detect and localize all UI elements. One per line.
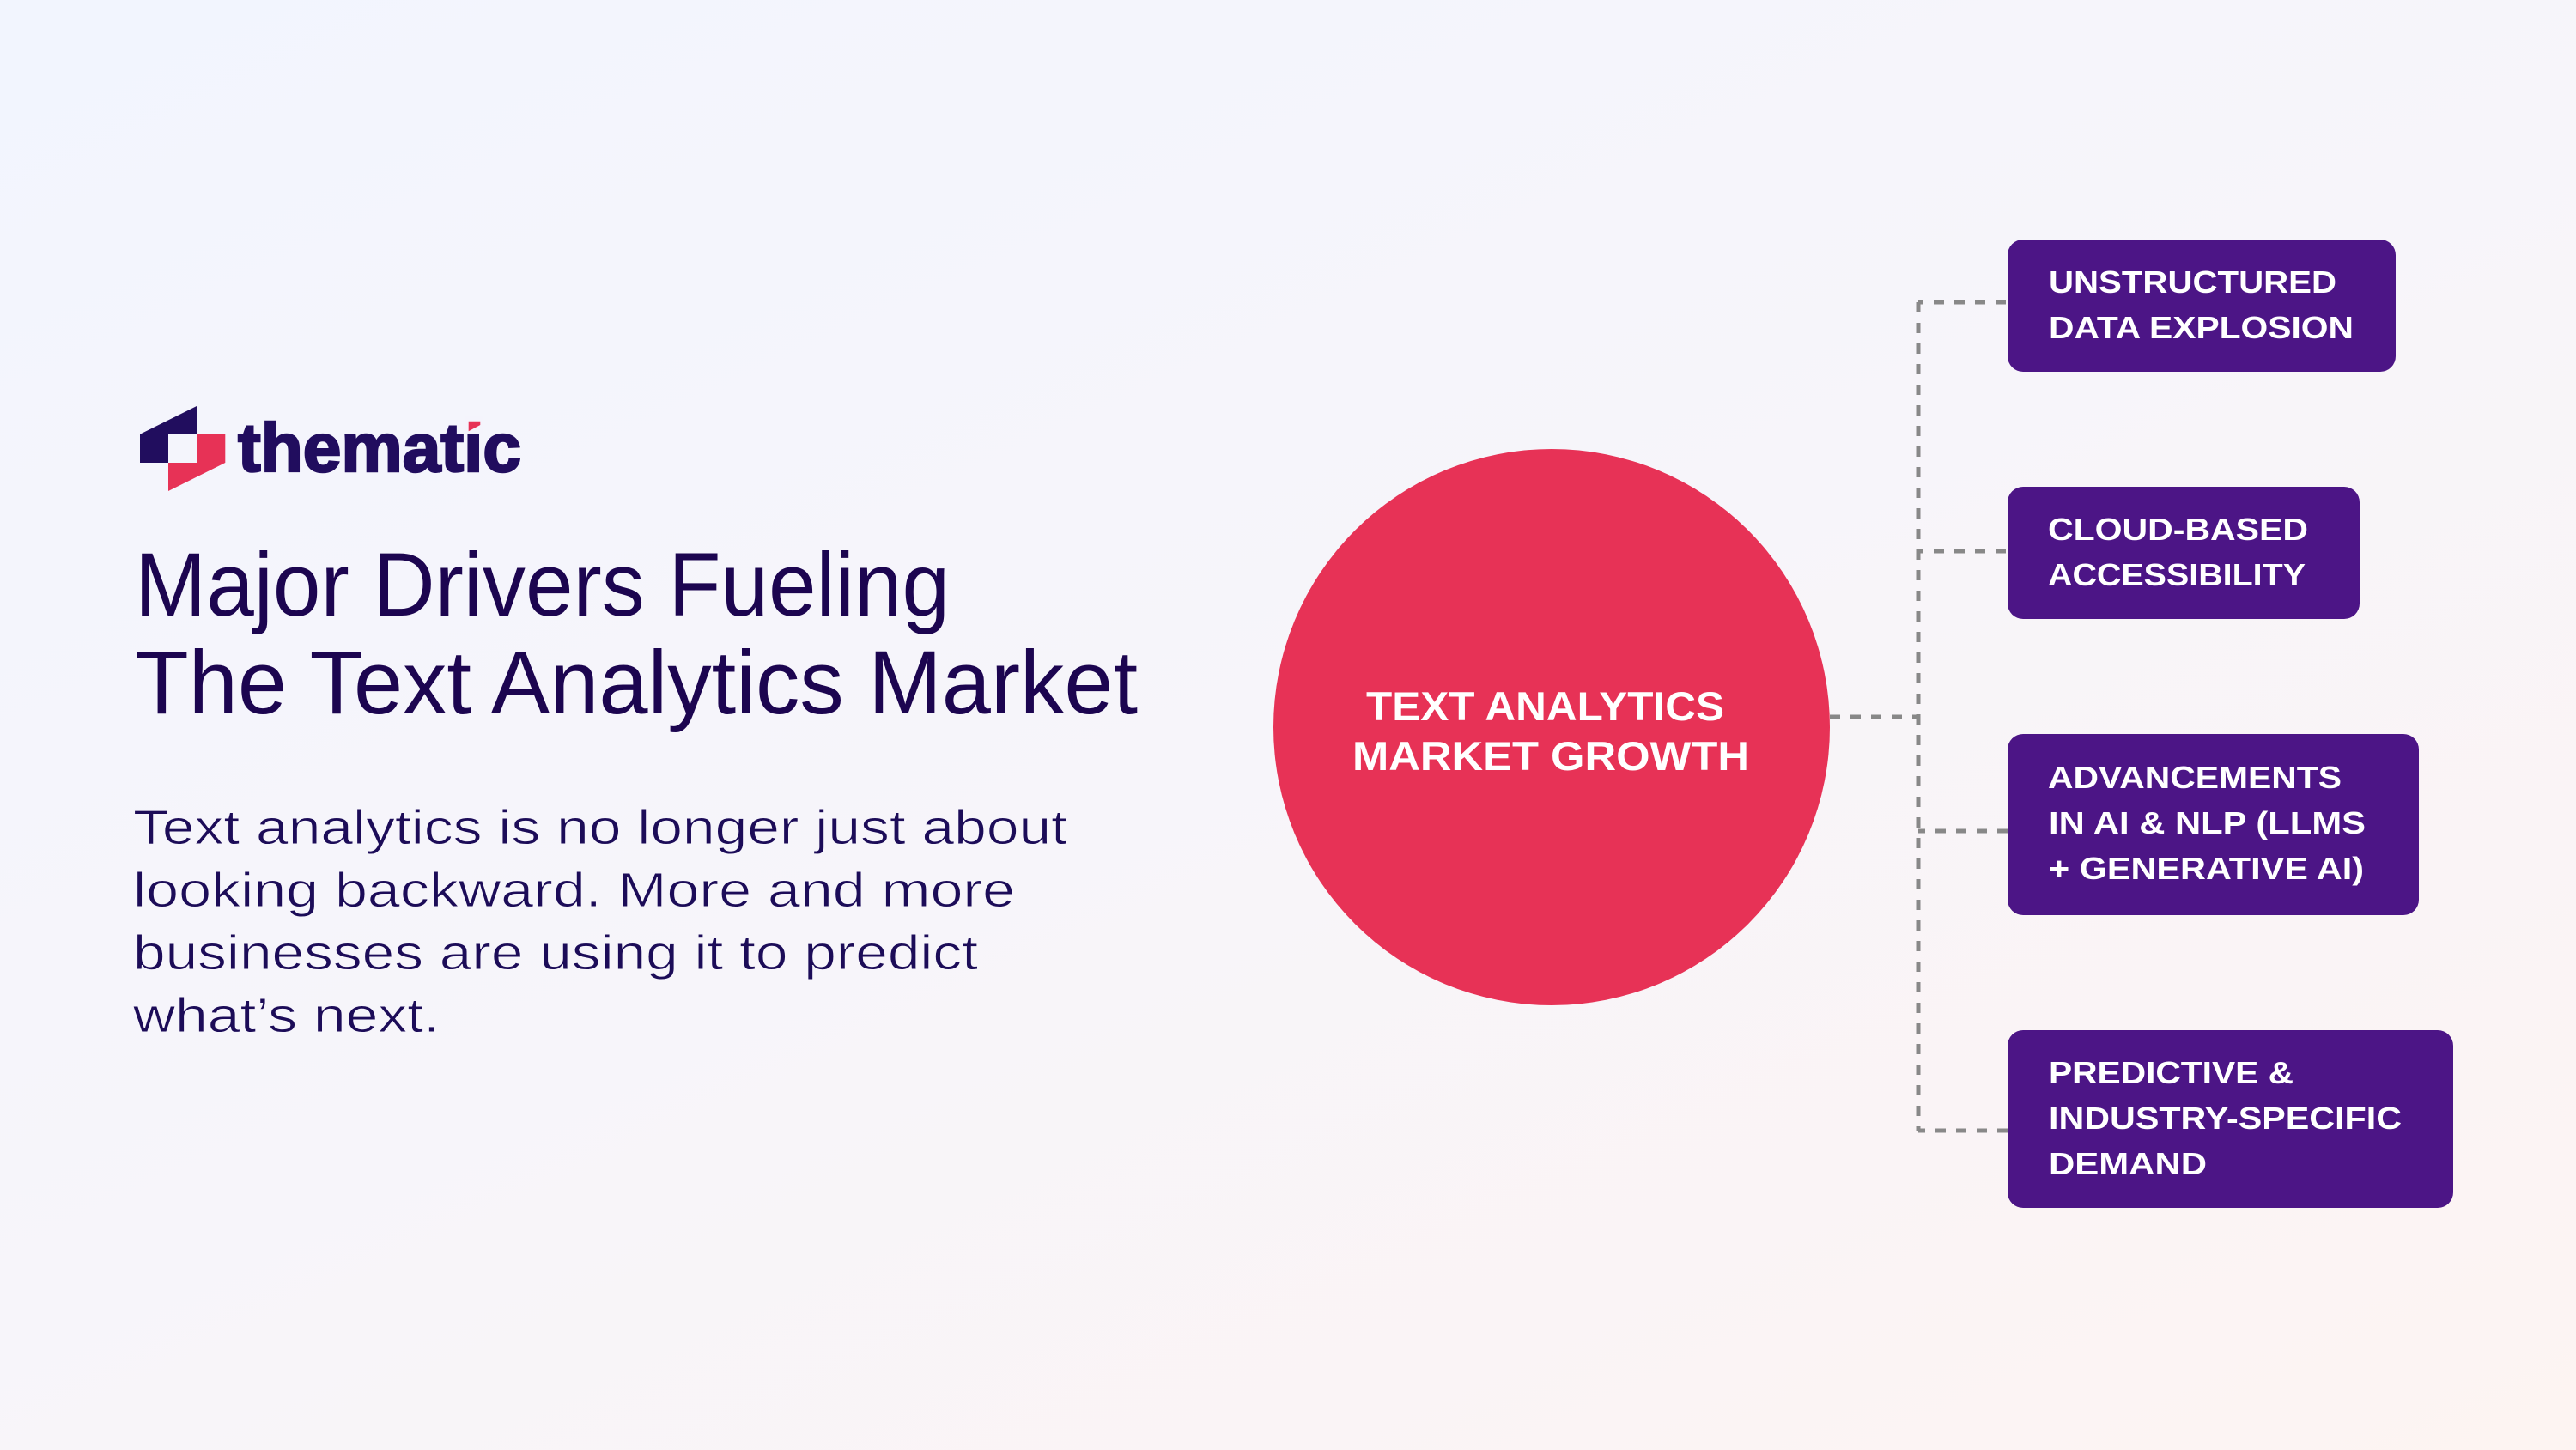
connector lines: [1830, 302, 2008, 1131]
driver box: unstructured data explosion: UNSTRUCTURED: [2049, 264, 2336, 300]
driver box: predictive and industry-specific demand: PREDICTIVE &: [2049, 1055, 2293, 1090]
body text: Text analytics is no longer just about: [133, 800, 1067, 855]
driver box: cloud-based accessibility: CLOUD-BASED: [2048, 512, 2308, 547]
mask over the dot of the letter i: [465, 416, 483, 433]
driver box: predictive and industry-specific demand: [2008, 1030, 2453, 1208]
driver box: predictive and industry-specific demand: DEMAND: [2049, 1146, 2207, 1181]
wordmark: thematic: [238, 410, 521, 486]
driver box: advancements in AI and NLP: ADVANCEMENTS: [2048, 760, 2342, 795]
body text: what’s next.: [132, 988, 440, 1043]
driver box: advancements in AI and NLP: + GENERATIVE AI): [2049, 851, 2364, 886]
title: Major Drivers Fueling: [135, 535, 950, 635]
central circle: text analytics market growth: TEXT ANALYTICS: [1366, 683, 1724, 729]
body text: [132, 800, 1067, 1043]
body text: businesses are using it to predict: [133, 925, 978, 980]
driver box: advancements in AI and NLP: IN AI & NLP (LLMS: [2049, 805, 2366, 840]
driver box: unstructured data explosion: [2008, 240, 2396, 372]
central circle: text analytics market growth: MARKET GROWTH: [1352, 733, 1749, 779]
logo: thematic: [140, 406, 521, 491]
driver box: cloud-based accessibility: ACCESSIBILITY: [2048, 557, 2306, 592]
icon: logo mark red part: [168, 434, 225, 491]
driver box: predictive and industry-specific demand: INDUSTRY-SPECIFIC: [2049, 1101, 2402, 1136]
driver box: cloud-based accessibility: [2008, 487, 2360, 619]
title: [135, 535, 1138, 733]
icon: red accent on the letter i: [469, 422, 480, 431]
icon: logo mark dark part: [140, 406, 197, 463]
driver box: advancements in AI and NLP: [2008, 734, 2419, 915]
driver box: unstructured data explosion: DATA EXPLOSION: [2049, 310, 2354, 345]
central circle: text analytics market growth: [1273, 449, 1830, 1005]
body text: looking backward. More and more: [133, 863, 1015, 918]
title: The Text Analytics Market: [135, 633, 1138, 733]
